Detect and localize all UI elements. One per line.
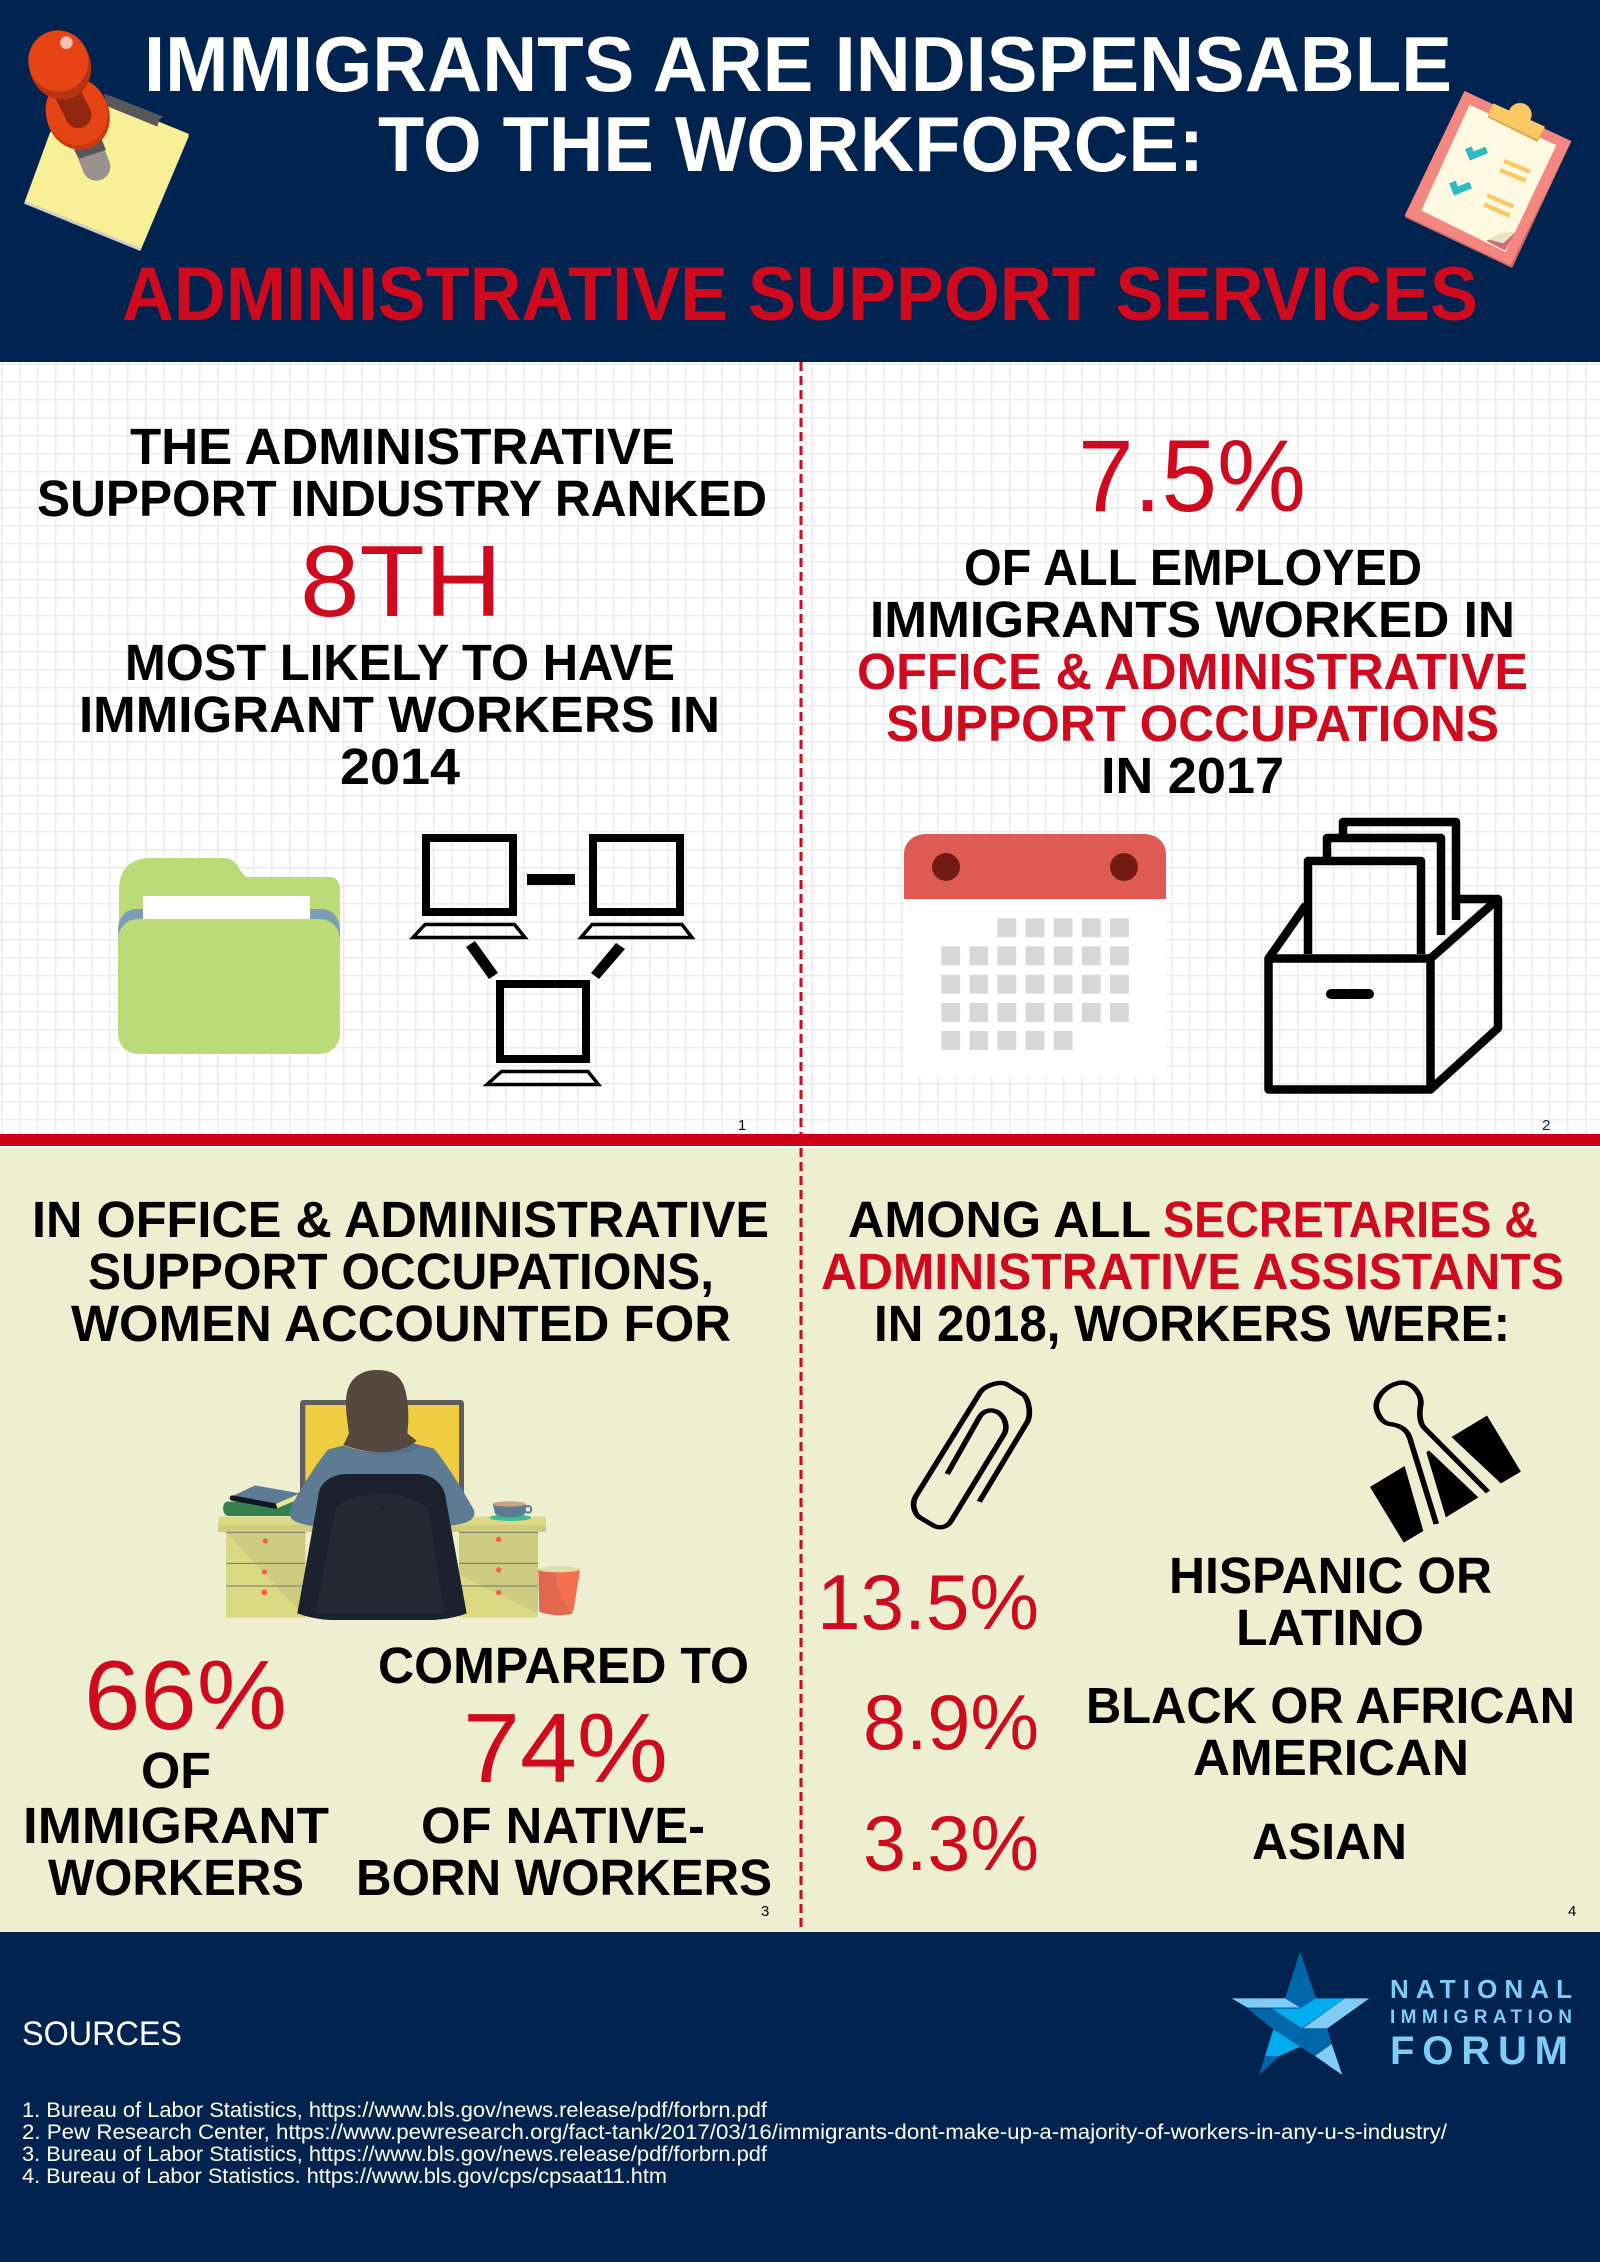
footer panel [0,1932,1600,2262]
panel: share of immigrants employed [800,362,1600,1134]
icon: paper clip [914,1383,1029,1527]
text: women accounted for: IN OFFICE & ADMINISTRATIVE [32,1191,769,1248]
statistic: 66% of immigrant workers: IMMIGRANT [23,1797,329,1854]
text: most likely [79,634,720,795]
icon: calendar [904,834,1166,1077]
statistic: 8.9% Black or African American: BLACK OR AFRICAN [1086,1677,1575,1734]
title [144,20,1452,188]
sources list: 3. Bureau of Labor Statistics, https://www.bls.gov/news.release/pdf/forbrn.pdf [22,2143,767,2166]
text: most likely: MOST LIKELY TO HAVE [125,634,675,691]
icon: clipboard checklist [1406,92,1570,267]
statistic: 66% of immigrant workers [23,1640,329,1906]
sources list: 4. Bureau of Labor Statistics. https://www.bls.gov/cps/cpsaat11.htm [22,2165,667,2188]
statistic: 13.5% Hispanic or Latino: HISPANIC OR [1169,1547,1492,1604]
icon: file box [1268,822,1498,1090]
logo star [1232,1952,1369,2075]
text: industry ranked [37,418,767,527]
subtitle: ADMINISTRATIVE SUPPORT SERVICES [122,252,1478,337]
sources list: 1. Bureau of Labor Statistics, https://www.bls.gov/news.release/pdf/forbrn.pdf [22,2099,767,2122]
statistic: 3.3% Asian: 3.3% [863,1799,1039,1887]
icon: sticky note with push pin [19,22,189,251]
text: most likely: IMMIGRANT WORKERS IN [79,686,720,743]
icon: binder clip [1370,1383,1521,1543]
text: women accounted for: WOMEN ACCOUNTED FOR [71,1295,731,1352]
panel: women share of occupations [0,1148,800,1932]
statistic: 66% of immigrant workers: WORKERS [48,1849,304,1906]
footnote 4: 4 [1568,1903,1576,1920]
statistic: 13.5% Hispanic or Latino [817,1547,1492,1656]
statistic: 13.5% Hispanic or Latino: LATINO [1236,1599,1424,1656]
text: women accounted for: SUPPORT OCCUPATIONS, [88,1243,714,1300]
footnote 1: 1 [738,1117,746,1134]
text: among all secretaries: AMONG ALL [848,1191,1151,1248]
statistic: compared to 74% of native-born workers: BORN WORKERS [356,1849,772,1906]
title: TO THE WORKFORCE: [378,100,1204,188]
statistic: 3.3% Asian [863,1799,1407,1887]
sources list: 2. Pew Research Center, https://www.pewresearch.org/fact-tank/2017/03/16/immigrants-dont-make-up-a-majority-of-workers-in-any-u-s-industry/ [22,2121,1447,2144]
text: employed immigrants [857,539,1528,804]
sources heading: SOURCES [22,2015,182,2053]
title: IMMIGRANTS ARE INDISPENSABLE [144,20,1452,108]
statistic: compared to 74% of native-born workers [356,1637,772,1906]
logo: National Immigration Forum: NATIONAL [1390,1974,1572,2004]
statistic: 8.9% Black or African American: 8.9% [863,1678,1039,1766]
statistic: 66% of immigrant workers: OF [141,1742,211,1799]
statistic: 13.5% Hispanic or Latino: 13.5% [817,1558,1039,1646]
text: employed immigrants: IN 2017 [1101,747,1284,804]
footnote 3: 3 [761,1903,769,1920]
statistic: 8.9% Black or African American [863,1677,1575,1786]
text: employed immigrants: OF ALL EMPLOYED [964,539,1422,596]
statistic: compared to 74% of native-born workers: 74% [463,1693,668,1803]
logo: National Immigration Forum: FORUM [1390,2029,1568,2073]
text: industry ranked: SUPPORT INDUSTRY RANKED [37,470,767,527]
footnote 2: 2 [1542,1117,1550,1134]
panel: secretaries and administrative assistants [800,1148,1600,1932]
text: most likely: 2014 [340,738,461,795]
text: employed immigrants: OFFICE & ADMINISTRATIVE [857,643,1528,700]
icon: folder [118,858,340,1054]
text: employed immigrants: SUPPORT OCCUPATIONS [886,695,1499,752]
icon: networked computers [413,838,692,1084]
text: employed immigrants: IMMIGRANTS WORKED IN [870,591,1515,648]
statistic: 8.9% Black or African American: AMERICAN [1193,1729,1469,1786]
statistic: 7.5%: 7.5% [1078,419,1306,533]
text: among all secretaries: IN 2018, WORKERS WERE: [874,1295,1510,1352]
statistic: 66% of immigrant workers: 66% [84,1640,287,1750]
sources list [22,2099,1447,2188]
statistic: compared to 74% of native-born workers: COMPARED TO [378,1637,749,1694]
text: women accounted for [32,1191,769,1352]
text: among all secretaries [821,1191,1564,1352]
divider band [0,1134,1600,1148]
logo: National Immigration Forum: IMMIGRATION [1390,2007,1572,2028]
panel: industry rank [0,362,800,1134]
text: among all secretaries: SECRETARIES & [1163,1191,1538,1248]
header banner [0,0,1600,362]
illustration: woman at desk [218,1370,580,1620]
logo: National Immigration Forum [1232,1952,1572,2075]
statistic: 8TH: 8TH [300,526,502,638]
text: among all secretaries: ADMINISTRATIVE ASSISTANTS [821,1243,1564,1300]
statistic: compared to 74% of native-born workers: OF NATIVE- [421,1797,705,1854]
text: industry ranked: THE ADMINISTRATIVE [130,418,675,475]
statistic: 3.3% Asian: ASIAN [1252,1813,1407,1870]
